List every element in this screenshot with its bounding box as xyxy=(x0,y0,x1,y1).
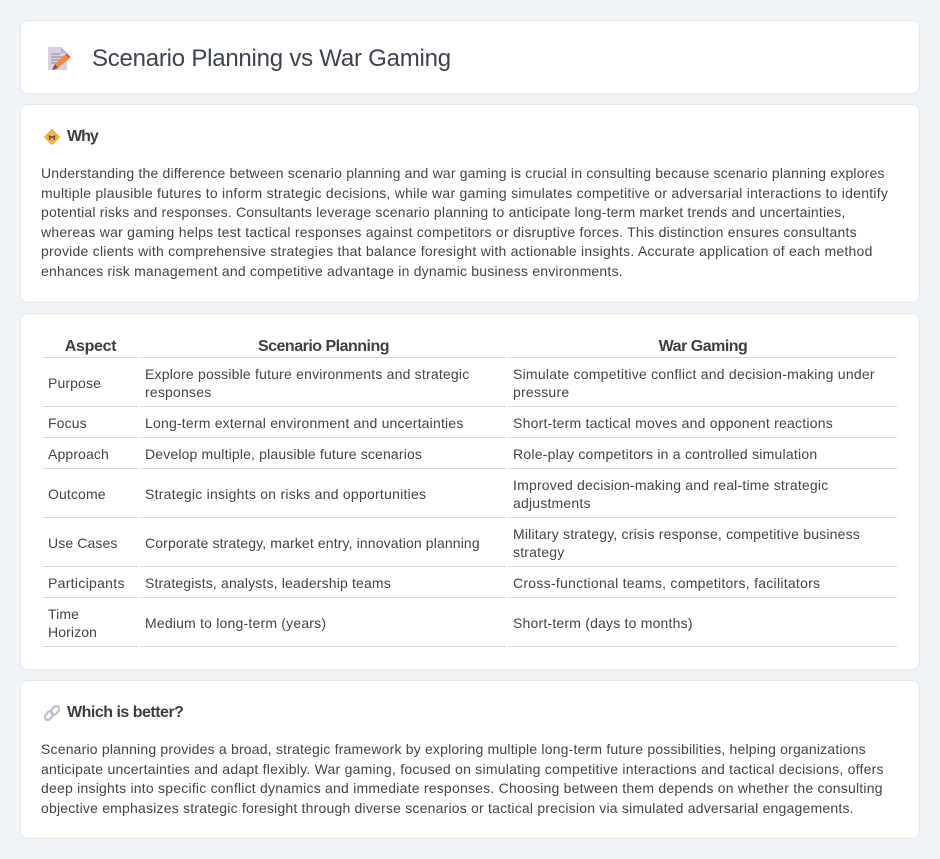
heading: why: Why xyxy=(67,128,98,145)
panel: comparison table card xyxy=(20,313,920,670)
table: comparison xyxy=(43,338,897,647)
table: comparison: Strategic insights on risks and opportunities xyxy=(145,486,426,502)
table: comparison: Develop multiple, plausible future scenarios xyxy=(145,446,422,462)
table: comparison: Military strategy, crisis response, competitive business xyxy=(513,526,860,542)
text block: which is better: deep insights into specific conflict dynamics and immediate responses. Choosing between them depends on whether the consulting xyxy=(41,780,883,796)
panel: which is better xyxy=(20,680,920,839)
text block: why: Understanding the difference between scenario planning and war gaming is crucial in consulting because scenario planning explores xyxy=(41,165,885,181)
panel: why xyxy=(20,104,920,303)
row: use cases: Use Cases xyxy=(48,535,118,551)
row: participants: Participants xyxy=(48,575,125,591)
table header: scenario planning: Scenario Planning xyxy=(258,338,389,355)
text block: which is better: Scenario planning provides a broad, strategic framework by exploring multiple long-term future possibilities, helping organizations xyxy=(41,741,866,757)
text block: why: potential risks and responses. Consultants leverage scenario planning to anticipate long-term market trends and uncertainties, xyxy=(41,204,846,220)
row: time horizon: Horizon xyxy=(48,624,97,640)
table: comparison: Strategists, analysts, leadership teams xyxy=(145,575,391,591)
table: comparison: Simulate competitive conflict and decision-making under xyxy=(513,366,875,382)
table: comparison: Long-term external environment and uncertainties xyxy=(145,415,464,431)
table: comparison: Improved decision-making and real-time strategic xyxy=(513,477,828,493)
text block: why: multiple plausible futures to inform strategic decisions, while war gaming simulates competitive or adversarial interactions to identify xyxy=(41,185,888,201)
row: purpose: Purpose xyxy=(48,375,101,391)
table: comparison: Short-term tactical moves and opponent reactions xyxy=(513,415,833,431)
table: comparison: Short-term (days to months) xyxy=(513,615,693,631)
table: comparison: Cross-functional teams, competitors, facilitators xyxy=(513,575,820,591)
row: approach: Approach xyxy=(48,446,109,462)
title: Scenario Planning vs War Gaming xyxy=(92,45,451,72)
row: time horizon xyxy=(48,606,97,640)
icon: document with pencil xyxy=(48,47,70,70)
table: comparison: strategy xyxy=(513,544,564,560)
text block: which is better: objective emphasizes strategic foresight through diverse scenarios or tactical precision via simulated adversarial engagements. xyxy=(41,800,854,816)
text block: which is better xyxy=(41,741,884,816)
table: comparison: Medium to long-term (years) xyxy=(145,615,326,631)
text block: which is better: anticipate uncertainties and adapt flexibly. War gaming, focused on simulating competitive interactions and tactical decisions, offers xyxy=(41,761,884,777)
text block: why: whereas war gaming helps test tactical responses against competitors or disruptive forces. This distinction ensures consultants xyxy=(41,224,857,240)
text block: why: enhances risk management and competitive advantage in dynamic business environments. xyxy=(41,263,623,279)
icon: warning diamond xyxy=(44,129,60,145)
table: comparison: Explore possible future environments and strategic xyxy=(145,366,469,382)
icon: chain link xyxy=(44,705,60,721)
table: comparison: pressure xyxy=(513,384,569,400)
heading: which is better: Which is better? xyxy=(67,704,183,721)
table: comparison: adjustments xyxy=(513,495,591,511)
row: outcome: Outcome xyxy=(48,486,106,502)
row: focus: Focus xyxy=(48,415,87,431)
table: comparison: Corporate strategy, market entry, innovation planning xyxy=(145,535,480,551)
table: comparison: Role-play competitors in a controlled simulation xyxy=(513,446,817,462)
row: time horizon: Time xyxy=(48,606,79,622)
table header: aspect: Aspect xyxy=(65,338,116,355)
text block: why: provide clients with comprehensive strategies that balance foresight with actionable insights. Accurate application of each method xyxy=(41,243,873,259)
table header: war gaming: War Gaming xyxy=(659,338,747,355)
panel: title card xyxy=(20,20,920,94)
text block: why xyxy=(41,165,888,279)
table: comparison: responses xyxy=(145,384,211,400)
